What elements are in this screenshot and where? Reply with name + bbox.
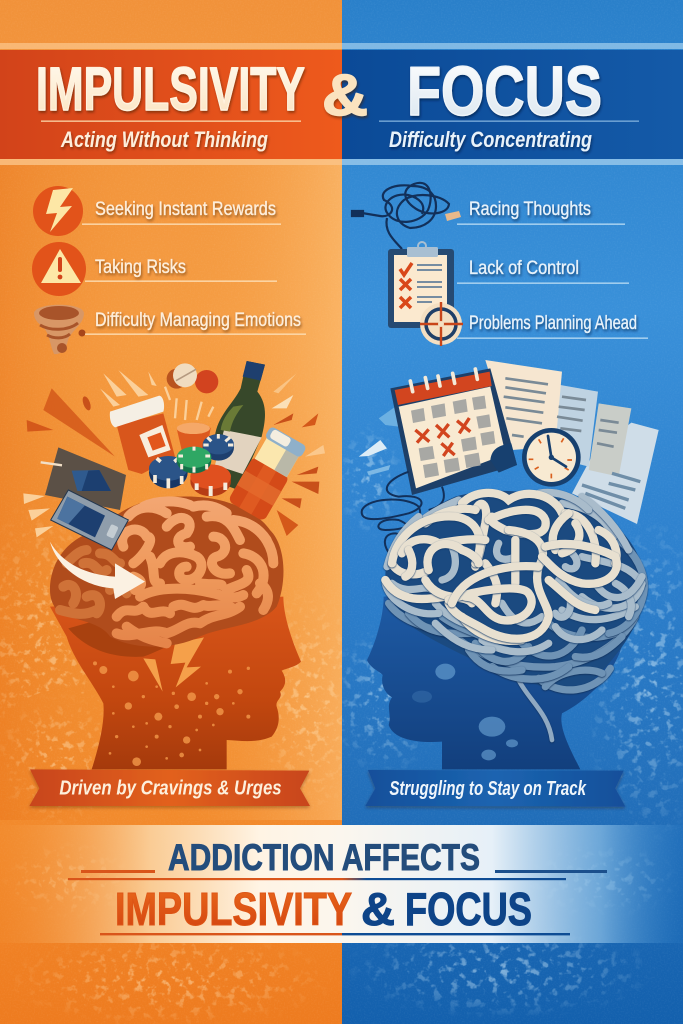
icon: small cup [177, 423, 211, 450]
icon: target [420, 302, 463, 346]
footer title: FOCUS [405, 883, 532, 935]
item: difficulty managing emotions: Difficulty Managing Emotions [95, 310, 301, 331]
icon: lightning [33, 186, 83, 236]
icon: tangled cord [352, 183, 461, 249]
icon: wine bottle [215, 361, 265, 490]
title: & [322, 63, 368, 128]
ribbon [365, 770, 625, 807]
subtitle: impulsivity: Acting Without Thinking [60, 127, 268, 152]
footer title: & [361, 883, 395, 935]
icon: pills [167, 363, 218, 393]
icon: tablet [41, 447, 126, 510]
icon: tornado [34, 305, 86, 354]
ribbon: Driven by Cravings & Urges [59, 777, 282, 799]
ribbon [29, 769, 310, 806]
brain [50, 497, 283, 657]
footer panel [0, 825, 683, 943]
list: impulsivity traits [32, 186, 306, 354]
head silhouette [50, 597, 301, 769]
icon: warning [32, 242, 86, 296]
arrow [50, 542, 145, 599]
footer heading: ADDICTION AFFECTS [168, 837, 480, 878]
head speckles [93, 661, 250, 766]
title: FOCUS [407, 52, 602, 130]
illustration: unfocused head [359, 360, 659, 807]
head speckles [412, 664, 518, 760]
item: taking risks: Taking Risks [95, 257, 186, 278]
ribbon: Struggling to Stay on Track [389, 778, 587, 800]
paint flecks [359, 407, 399, 475]
head silhouette [367, 583, 625, 769]
header band [0, 43, 683, 165]
item: lack of control: Lack of Control [469, 258, 579, 279]
title: IMPULSIVITY [36, 55, 305, 123]
item: seeking instant rewards: Seeking Instant Rewards [95, 199, 276, 220]
subtitle: focus: Difficulty Concentrating [389, 127, 592, 152]
icon: phone [51, 490, 128, 550]
icon: clock [522, 428, 581, 487]
illustration: impulsive head [23, 361, 325, 806]
title [36, 52, 602, 130]
rays [23, 370, 325, 537]
scribble [362, 472, 444, 556]
footer title: IMPULSIVITY [115, 883, 352, 935]
item: problems planning ahead: Problems Planning Ahead [469, 313, 637, 334]
icon: pill bottle [110, 396, 175, 474]
icon: poker chips [149, 434, 234, 496]
item: racing thoughts: Racing Thoughts [469, 199, 591, 220]
background: blue right half [342, 0, 683, 1024]
tangled brain [385, 491, 645, 740]
icon: papers [485, 360, 659, 524]
footer title [115, 883, 532, 935]
head lightning bolts [143, 637, 204, 692]
list: focus traits [352, 183, 648, 346]
icon: clipboard [388, 242, 454, 328]
icon: calendar [390, 368, 517, 495]
background: orange left half [0, 0, 342, 1024]
footer rules [68, 870, 607, 935]
icon: orange bottle [228, 426, 307, 522]
